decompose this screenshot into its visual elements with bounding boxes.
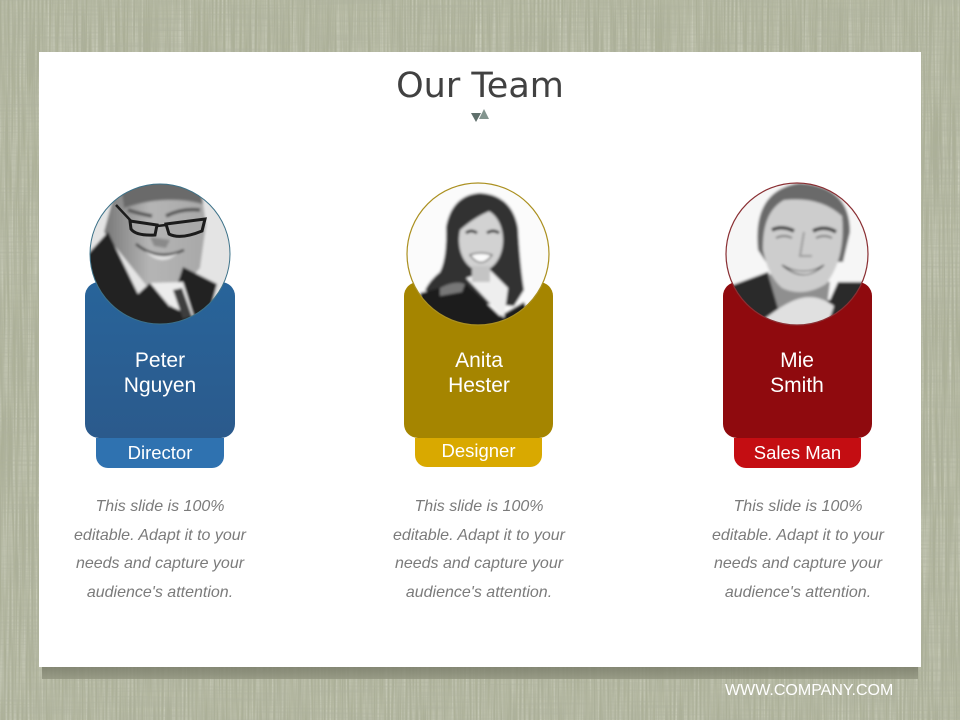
title: Our Team	[396, 66, 564, 106]
role tab: Designer: Designer	[441, 440, 516, 461]
role tab: Director	[96, 438, 224, 468]
role tab: Sales Man: Sales Man	[754, 442, 841, 463]
description: Anita Hester: audience's attention.	[406, 584, 552, 601]
panel: Anita Hester	[393, 182, 566, 601]
description: Peter Nguyen: needs and capture your	[76, 555, 244, 572]
portrait: Anita Hester	[406, 182, 550, 326]
name: Anita Hester: Anita	[455, 349, 503, 372]
description: Mie Smith	[712, 498, 884, 601]
name: Anita Hester	[448, 349, 510, 397]
icon: title triangles	[471, 109, 489, 122]
role tab: Designer	[415, 438, 542, 467]
description: Mie Smith: This slide is 100%	[734, 498, 862, 515]
portrait: Mie Smith	[725, 182, 869, 326]
name: Peter Nguyen: Nguyen	[124, 374, 196, 397]
role tab: Sales Man	[734, 438, 861, 468]
description: Anita Hester	[393, 498, 566, 601]
description: Mie Smith: audience's attention.	[725, 584, 871, 601]
description: Anita Hester: This slide is 100%	[415, 498, 543, 515]
card: Mie Smith	[723, 282, 872, 438]
glasses	[130, 219, 205, 236]
description: Peter Nguyen: editable. Adapt it to your	[74, 527, 246, 544]
name: Mie Smith: Mie	[780, 349, 814, 372]
portrait: Peter Nguyen	[90, 184, 230, 324]
footer website: WWW.COMPANY.COM	[725, 682, 893, 699]
description: Peter Nguyen: audience's attention.	[87, 584, 233, 601]
panel: Peter Nguyen	[74, 184, 246, 601]
white panel	[39, 52, 921, 667]
card: Anita Hester	[404, 282, 553, 438]
name: Peter Nguyen	[124, 349, 196, 397]
description: Peter Nguyen	[74, 498, 246, 601]
description: Anita Hester: editable. Adapt it to your	[393, 527, 565, 544]
description: Mie Smith: needs and capture your	[714, 555, 882, 572]
card: Peter Nguyen	[85, 282, 235, 438]
description: Peter Nguyen: This slide is 100%	[96, 498, 224, 515]
name: Anita Hester: Hester	[448, 374, 510, 397]
role tab: Director: Director	[128, 442, 192, 463]
name: Mie Smith	[770, 349, 824, 397]
name: Mie Smith: Smith	[770, 374, 824, 397]
name: Peter Nguyen: Peter	[135, 349, 185, 372]
description: Anita Hester: needs and capture your	[395, 555, 563, 572]
panel shadow	[42, 667, 918, 679]
description: Mie Smith: editable. Adapt it to your	[712, 527, 884, 544]
panel: Mie Smith	[712, 182, 884, 597]
